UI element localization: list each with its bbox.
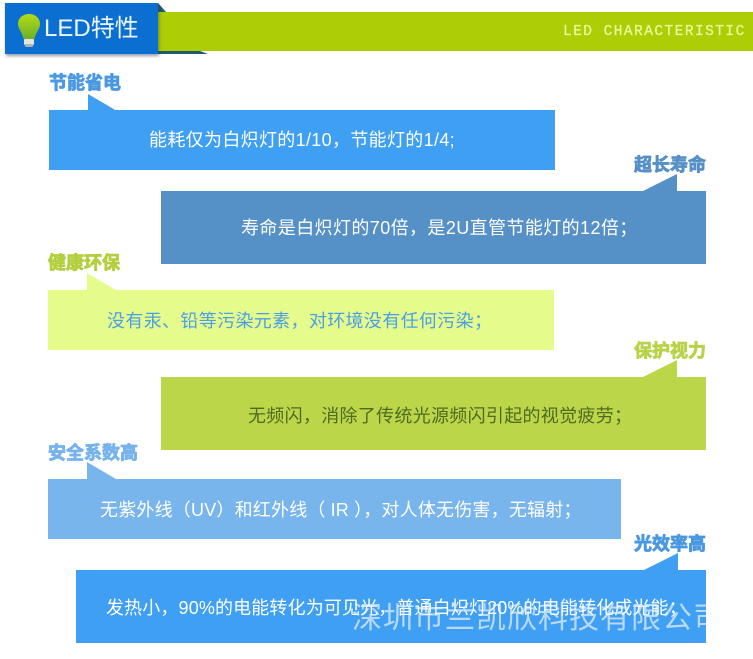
pointer [87, 462, 116, 479]
text box [48, 290, 554, 350]
panel: energy saving [49, 72, 555, 170]
text box: 无紫外线（UV）和红外线（ IR ），对人体无伤害，无辐射； [100, 500, 582, 520]
pointer [644, 553, 678, 570]
panel: eco friendly [48, 252, 554, 350]
text box [161, 191, 706, 264]
text box: 能耗仅为白炽灯的1/10，节能灯的1/4; [149, 130, 455, 150]
pointer [643, 174, 677, 191]
heading: safety: 安全系数高 [48, 443, 138, 463]
text box: 寿命是白炽灯的70倍，是2U直管节能灯的12倍； [241, 218, 638, 238]
text box: 没有汞、铅等污染元素，对环境没有任何污染； [107, 311, 492, 331]
panel: high efficiency [76, 534, 706, 643]
text box [76, 570, 706, 643]
title text: LED特性 [44, 15, 139, 42]
heading: eye protection: 保护视力 [634, 341, 706, 361]
pointer [87, 273, 116, 290]
header: english subtitle: LED CHARACTERISTIC [563, 24, 746, 40]
panel: safety [48, 442, 621, 539]
panel: eye protection [161, 340, 706, 450]
header: blue title tab [5, 3, 158, 54]
text box: 无频闪，消除了传统光源频闪引起的视觉疲劳； [248, 406, 632, 426]
heading: high efficiency: 光效率高 [634, 534, 706, 554]
panel: long life [161, 154, 706, 264]
header: green banner [158, 12, 753, 51]
text box [161, 377, 706, 450]
icon: light bulb [18, 14, 40, 47]
heading: eco friendly: 健康环保 [48, 253, 120, 273]
text box [48, 479, 621, 539]
pointer [643, 360, 677, 377]
heading: energy saving: 节能省电 [49, 73, 121, 93]
heading: long life: 超长寿命 [634, 155, 706, 175]
text box [49, 110, 555, 170]
text box: 发热小，90%的电能转化为可见光，普通白炽灯20%的电能转化成光能； [106, 598, 687, 618]
pointer [88, 94, 116, 110]
